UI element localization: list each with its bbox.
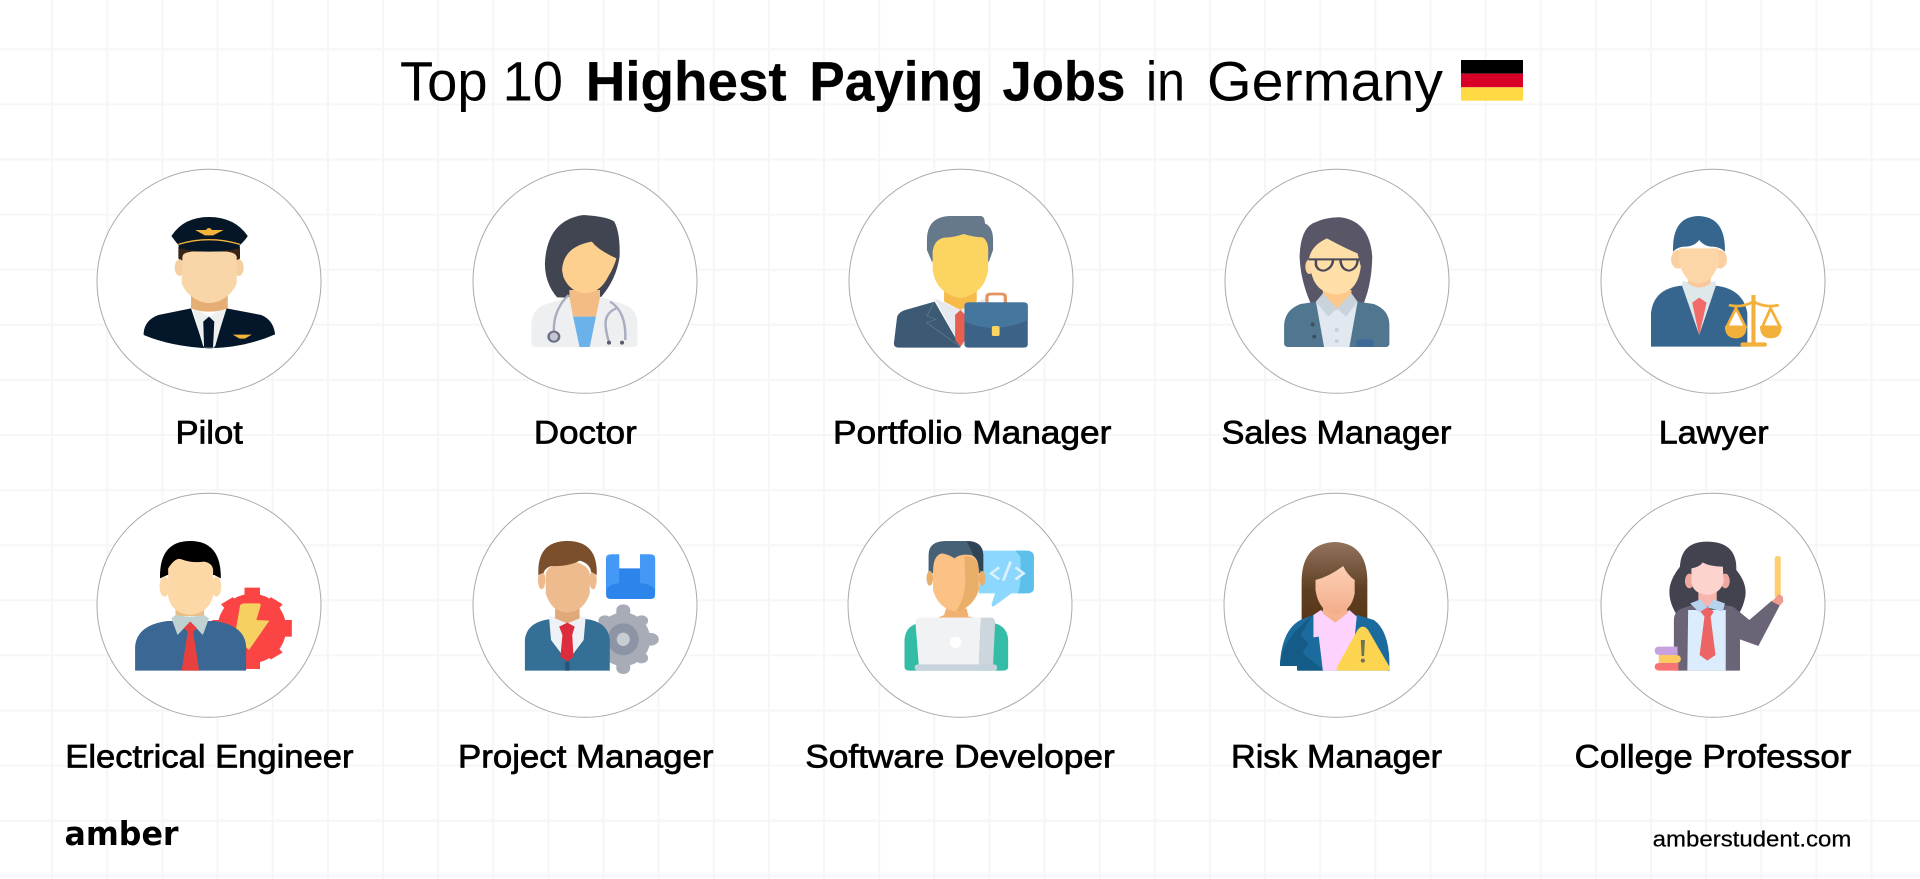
panel: Doctor: [473, 169, 697, 451]
title: Germany: [1207, 50, 1443, 113]
icon: portfolio manager: [894, 216, 1028, 348]
panel: Software Developer: [805, 493, 1115, 775]
icon: doctor: [531, 215, 638, 347]
label: College Professor: [1575, 739, 1852, 775]
panel: Sales Manager: [1222, 169, 1452, 451]
icon: lawyer: [1651, 216, 1782, 347]
icon: college professor: [1655, 542, 1783, 671]
panel: Project Manager: [458, 493, 714, 775]
title: Paying: [809, 50, 983, 113]
panel: Electrical Engineer: [65, 493, 354, 775]
label: Project Manager: [458, 739, 714, 775]
title: Highest: [586, 50, 787, 113]
icon: risk manager: [1280, 542, 1390, 671]
icon: German flag: [1461, 60, 1523, 101]
panel: Lawyer: [1601, 169, 1825, 451]
panel: Risk Manager: [1224, 493, 1448, 775]
panel: Pilot: [97, 169, 321, 451]
label: Lawyer: [1659, 415, 1769, 451]
panel: College Professor: [1575, 493, 1852, 775]
title: in: [1146, 50, 1185, 113]
title: Top 10: [400, 50, 563, 113]
label: Electrical Engineer: [65, 739, 354, 775]
label: Sales Manager: [1222, 415, 1452, 451]
title: [400, 50, 1443, 113]
icon: software developer: [904, 541, 1034, 671]
logo: amber: amber: [64, 814, 179, 853]
icon: project manager: [525, 541, 655, 671]
icon: electrical engineer: [135, 541, 292, 671]
footer website: amberstudent.com: [1653, 827, 1851, 852]
label: Portfolio Manager: [833, 415, 1112, 451]
label: Software Developer: [805, 739, 1115, 775]
title: Jobs: [1002, 50, 1125, 113]
icon: sales manager: [1284, 217, 1389, 347]
label: Doctor: [534, 415, 637, 451]
label: Pilot: [176, 415, 243, 451]
label: Risk Manager: [1231, 739, 1442, 775]
icon: pilot: [144, 217, 275, 348]
panel: Portfolio Manager: [833, 169, 1112, 451]
